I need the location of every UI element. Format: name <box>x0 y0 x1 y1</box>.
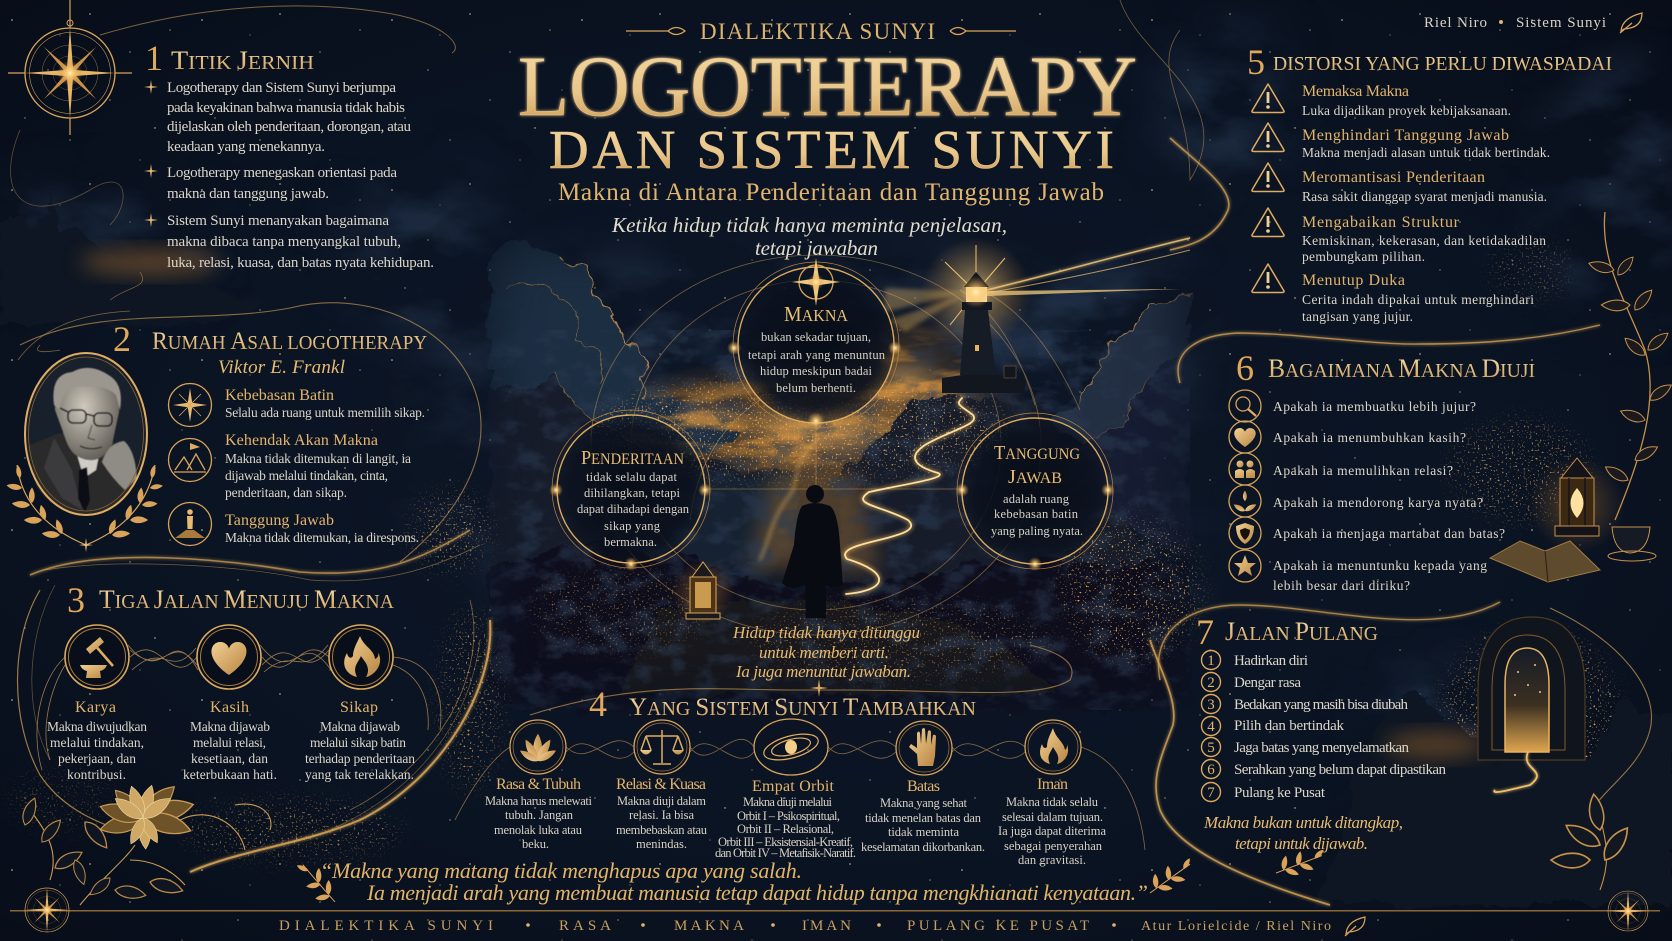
footer text: IMAN <box>802 918 851 934</box>
item: Relasi & Kuasa: Relasi & Kuasa <box>616 776 706 793</box>
item: Relasi & Kuasa: menindas. <box>636 837 687 851</box>
concept: Penderitaan circle: PENDERITAAN <box>581 447 684 469</box>
item: Rasa & Tubuh: tubuh. Jangan <box>505 808 574 822</box>
item: Sikap: melalui sikap batin <box>310 735 406 750</box>
icon: compass top-left <box>8 0 132 135</box>
laurel left <box>295 860 335 905</box>
heading: Distorsi: 5 <box>1247 42 1265 82</box>
quote: closing: Ia menjadi arah yang membuat manusia tetap dapat hidup tanpa mengkhianati kenyataan.” <box>366 880 1148 905</box>
item: Tanggung Jawab: Makna tidak ditemukan, ia direspons. <box>225 530 419 545</box>
concept: Tanggung Jawab circle <box>955 413 1115 571</box>
question: karya <box>1229 485 1483 517</box>
item: Tanggung Jawab <box>168 502 419 546</box>
item: Menghindari Tanggung Jawab <box>1302 127 1550 160</box>
quote: Hidup tidak hanya ditunggu: untuk memberi arti. <box>759 643 889 662</box>
item: Mengabaikan Struktur: Kemiskinan, kekerasan, dan ketidakadilan <box>1302 233 1546 248</box>
item: Iman: selesai dalam tujuan. <box>1002 810 1103 824</box>
panel: section 2 Rumah Asal Logotherapy <box>6 319 427 552</box>
panel: section 3 Tiga Jalan Menuju Makna <box>37 580 441 782</box>
concept: Penderitaan circle: dapat dihadapi dengan <box>577 502 690 516</box>
item: Kebebasan Batin: Selalu ada ruang untuk memilih sikap. <box>225 405 425 420</box>
item: Sikap: yang tak terelakkan. <box>305 767 414 782</box>
panel: section 7 Jalan Pulang: 3 <box>1207 697 1215 713</box>
flow lines between circles <box>37 645 441 770</box>
steps text: Pilih dan bertindak <box>1234 718 1344 734</box>
steps text: Serahkan yang belum dapat dipastikan <box>1234 762 1446 778</box>
right clouds and mountains <box>1040 290 1190 560</box>
text block: third point: Sistem Sunyi menanyakan bagaimana <box>167 213 389 229</box>
item: Relasi & Kuasa: membebaskan atau <box>616 823 708 837</box>
quote: closing: “Makna yang matang tidak menghapus apa yang salah. <box>320 858 802 883</box>
item: Mengabaikan Struktur: Mengabaikan Struktur <box>1302 214 1460 231</box>
question: relasi <box>1229 453 1453 485</box>
concept: Tanggung Jawab circle: kebebasan batin <box>994 507 1079 521</box>
left clouds <box>490 243 800 600</box>
quote: Makna bukan: Makna bukan untuk ditangkap, <box>1203 813 1403 832</box>
item: Menghindari Tanggung Jawab: Makna menjadi alasan untuk tidak bertindak. <box>1302 145 1550 160</box>
item: Iman: dan gravitasi. <box>1018 853 1086 867</box>
item: Kasih: Kasih <box>210 699 249 716</box>
item: Karya <box>47 625 147 782</box>
panel: section 5 Distorsi <box>1247 13 1642 324</box>
heading: Rumah Asal Logotherapy: 2 <box>113 319 131 359</box>
panel: section 4 Yang Sistem Sunyi Tambahkan <box>455 684 1145 867</box>
heading: Yang Sistem Sunyi Tambahkan: 4 <box>589 684 607 724</box>
question: kasih: Apakah ia menumbuhkan kasih? <box>1273 430 1466 445</box>
concept: Penderitaan circle: bermakna. <box>604 535 657 549</box>
bullet icons <box>144 80 158 227</box>
question: lebih besar: lebih besar dari diriku? <box>1273 578 1410 593</box>
text block: first point: dijelaskan oleh penderitaan, dorongan, atau <box>167 119 412 135</box>
heading: Bagaimana Makna Diuji: BAGAIMANA MAKNA DIUJI <box>1268 354 1535 383</box>
connecting flow lines <box>455 739 1145 850</box>
title: Dan Sistem Sunyi: DAN SISTEM SUNYI <box>549 119 1114 180</box>
concept: Makna circle: hidup meskipun badai <box>760 364 873 378</box>
item: Kehendak Akan Makna: Makna tidak ditemukan di langit, ia <box>225 451 411 466</box>
decoration: leaves bottom-right <box>1551 793 1633 890</box>
heading: Jalan Pulang <box>1196 612 1378 652</box>
question: karya: Apakah ia mendorong karya nyata? <box>1273 495 1483 510</box>
item: Rasa & Tubuh: Rasa & Tubuh <box>496 776 581 793</box>
heading: Titik Jernih <box>145 38 314 78</box>
heading: Distorsi: DISTORSI YANG PERLU DIWASPADAI <box>1273 53 1612 75</box>
tagline: tetapi jawaban <box>755 236 878 260</box>
concept: Tanggung Jawab circle: yang paling nyata. <box>991 524 1083 538</box>
subtitle: Makna di Antara Penderitaan dan Tanggung Jawab <box>558 179 1104 206</box>
orbit lines <box>591 255 1080 635</box>
footer line and compasses <box>10 884 1660 936</box>
item: Kehendak Akan Makna: penderitaan, dan sikap. <box>225 485 347 500</box>
item: Kehendak Akan Makna: Kehendak Akan Makna <box>225 432 378 449</box>
item: Batas: keselamatan dikorbankan. <box>861 840 985 854</box>
panel: section 1 Titik Jernih <box>144 38 434 271</box>
concept: Makna circle: belum berhenti. <box>776 381 856 395</box>
item: Empat Orbit: Orbit I – Psikospiritual, <box>737 809 840 823</box>
item: Mengabaikan Struktur <box>1302 214 1546 264</box>
text block: second point: Logotherapy menegaskan orientasi pada <box>167 165 397 181</box>
item: Empat Orbit <box>715 719 856 860</box>
concept: Makna circle: bukan sekadar tujuan, <box>761 330 871 344</box>
question: kasih <box>1229 421 1466 453</box>
landscape: upper-left forest and hills <box>0 195 270 325</box>
numbered steps <box>1202 650 1220 802</box>
illustration: glowing archway <box>1478 617 1585 792</box>
flourish below quote <box>810 679 828 697</box>
panel: section 7 Jalan Pulang: 4 <box>1207 719 1215 735</box>
item: Empat Orbit: Orbit III – Eksistensial-Kreatif, <box>718 835 853 849</box>
concept: Penderitaan circle <box>549 410 712 571</box>
item: Empat Orbit: Empat Orbit <box>752 778 835 795</box>
landscape: central valley, clouds and mountains <box>490 243 1190 710</box>
item: Iman: sebagai penyerahan <box>1004 839 1103 853</box>
text block: third point: luka, relasi, kuasa, dan batas nyata kehidupan. <box>167 255 434 271</box>
item: Batas: tidak menelan batas dan <box>865 811 982 825</box>
item: Iman: Makna tidak selalu <box>1006 795 1099 809</box>
concept: Penderitaan circle: tidak selalu dapat <box>586 470 678 484</box>
quote: Hidup tidak hanya ditunggu <box>732 623 920 681</box>
footer text: PULANG KE PUSAT <box>907 918 1089 934</box>
item: Batas: tidak meminta <box>888 825 959 839</box>
panel: section 7 Jalan Pulang: 7 <box>1207 785 1215 801</box>
item: Iman: Ia juga dapat diterima <box>998 824 1106 838</box>
concept: Makna circle <box>727 258 902 430</box>
figure: standing person <box>782 485 843 618</box>
item: Iman <box>998 720 1106 867</box>
heading: Rumah Asal Logotherapy: RUMAH ASAL LOGOTHERAPY <box>152 328 427 355</box>
item: Kehendak Akan Makna: dijawab melalui tindakan, cinta, <box>225 468 388 483</box>
item: Sikap: Sikap <box>340 699 378 716</box>
icon: lantern on ground <box>671 560 735 624</box>
item: Meromantisasi Penderitaan: Meromantisasi Penderitaan <box>1302 169 1485 186</box>
icon: crescent moon <box>471 150 505 193</box>
steps text: Hadirkan diri <box>1234 653 1308 669</box>
text block: second point: makna dan tanggung jawab. <box>167 186 329 202</box>
question: lebih besar <box>1229 550 1487 593</box>
panel: section 7 Jalan Pulang: 1 <box>1207 653 1215 669</box>
item: Sikap: Makna dijawab <box>320 719 400 734</box>
heading: Tiga Jalan Menuju Makna: TIGA JALAN MENUJU MAKNA <box>99 585 395 614</box>
concept: Penderitaan circle: dihilangkan, tetapi <box>584 486 681 500</box>
text block: first point: keadaan yang menekannya. <box>167 139 325 155</box>
laurel under portrait <box>6 465 163 552</box>
panel: section 7 Jalan Pulang: 2 <box>1207 675 1215 691</box>
question: martabat: Apakah ia menjaga martabat dan batas? <box>1273 526 1505 541</box>
panel: section 7 Jalan Pulang <box>1196 612 1446 884</box>
item: Karya: Karya <box>75 699 116 716</box>
item: Menutup Duka <box>1302 272 1534 324</box>
item: Memaksa Makna: Memaksa Makna <box>1302 83 1409 100</box>
item: Rasa & Tubuh <box>485 720 593 851</box>
steps text <box>1234 653 1446 801</box>
item: Sikap: terhadap penderitaan <box>305 751 415 766</box>
heading: Tiga Jalan Menuju Makna <box>67 580 395 620</box>
steps text: Bedakan yang masih bisa diubah <box>1234 697 1408 713</box>
quote: Makna bukan <box>1203 813 1403 853</box>
concept: Penderitaan circle: sikap yang <box>604 519 661 533</box>
question: lebih besar: Apakah ia menuntunku kepada yang <box>1273 558 1487 573</box>
item: Meromantisasi Penderitaan: Rasa sakit dianggap syarat menjadi manusia. <box>1302 189 1547 204</box>
item: Meromantisasi Penderitaan <box>1302 169 1547 204</box>
item: Karya: melalui tindakan, <box>50 735 144 750</box>
warning icons <box>1252 84 1284 292</box>
question: relasi: Apakah ia memulihkan relasi? <box>1273 463 1453 478</box>
item: Rasa & Tubuh: Makna harus melewati <box>485 794 593 808</box>
footer text: MAKNA <box>674 918 744 934</box>
golden lit cloud band <box>646 326 968 473</box>
concept: Tanggung Jawab circle: JAWAB <box>1008 466 1062 488</box>
tagline <box>611 213 1007 260</box>
item: Kasih: melalui relasi, <box>193 735 266 750</box>
item: Menutup Duka: Cerita indah dipakai untuk menghindari <box>1302 292 1534 307</box>
header: Dialektika Sunyi <box>626 19 1016 44</box>
credit: Riel Niro Sistem Sunyi <box>1424 13 1642 33</box>
steps text: Dengar rasa <box>1234 675 1301 691</box>
item: Kasih: kesetiaan, dan <box>191 751 268 766</box>
heading: Bagaimana Makna Diuji: 6 <box>1236 348 1254 388</box>
item: Memaksa Makna: Luka dijadikan proyek kebijaksanaan. <box>1302 103 1511 118</box>
panel: section 7 Jalan Pulang: 6 <box>1207 762 1215 778</box>
item: Mengabaikan Struktur: pembungkam pilihan. <box>1302 249 1425 264</box>
item: Batas: Batas <box>907 778 940 795</box>
item: Empat Orbit: Orbit II – Relasional, <box>737 822 834 836</box>
question: jujur: Apakah ia membuatku lebih jujur? <box>1273 399 1476 414</box>
heading: Distorsi <box>1247 42 1612 82</box>
item: Menutup Duka: Menutup Duka <box>1302 272 1405 289</box>
text block: second point <box>167 165 397 202</box>
footer text: DIALEKTIKA SUNYI <box>279 918 493 934</box>
winding golden path <box>760 398 974 594</box>
quote: Makna bukan: tetapi untuk dijawab. <box>1235 834 1368 853</box>
item: Karya: kontribusi. <box>67 767 126 782</box>
rock texture <box>490 330 1190 710</box>
item: Kasih: keterbukaan hati. <box>183 767 277 782</box>
concept: Makna circle: MAKNA <box>784 302 849 326</box>
text block: first point: Logotherapy dan Sistem Sunyi berjumpa <box>167 80 396 96</box>
concept: Tanggung Jawab circle: adalah ruang <box>1003 492 1070 506</box>
heading: Jalan Pulang: JALAN PULANG <box>1225 617 1378 646</box>
illustration: lantern, book and cup <box>1490 457 1656 582</box>
horizon light <box>644 365 1024 488</box>
heading: Titik Jernih: TITIK JERNIH <box>171 46 314 75</box>
item: Menutup Duka: tangisan yang jujur. <box>1302 309 1413 324</box>
item: Karya: Makna diwujudkan <box>47 719 147 734</box>
heading: Rumah Asal Logotherapy <box>113 319 427 359</box>
item: Rasa & Tubuh: beku. <box>522 837 549 851</box>
lighthouse with beams <box>885 237 1190 393</box>
text block: third point: makna dibaca tanpa menyangkal tubuh, <box>167 234 401 250</box>
heading: Bagaimana Makna Diuji <box>1236 348 1535 388</box>
item: Memaksa Makna <box>1302 83 1511 118</box>
question: jujur <box>1229 390 1476 422</box>
heading: Yang Sistem Sunyi Tambahkan <box>589 684 976 724</box>
footer text: Atur Lorielcide / Riel Niro <box>1141 919 1331 934</box>
item: Sikap <box>305 625 415 782</box>
steps text: Pulang ke Pusat <box>1234 785 1326 801</box>
header: Dialektika Sunyi: DIALEKTIKA SUNYI <box>700 19 935 44</box>
footer text <box>279 917 1365 936</box>
item: Kebebasan Batin: Kebebasan Batin <box>225 387 334 404</box>
text block: first point <box>167 80 412 155</box>
credit: Riel Niro Sistem Sunyi: Sistem Sunyi <box>1516 15 1606 31</box>
heading: Jalan Pulang: 7 <box>1196 612 1214 652</box>
heading: Tiga Jalan Menuju Makna: 3 <box>67 580 85 620</box>
item: Tanggung Jawab: Tanggung Jawab <box>225 512 334 529</box>
item: Empat Orbit: Makna diuji melalui <box>743 795 833 809</box>
landscape: section 7 mountains and right foliage <box>1320 690 1672 905</box>
panel: section 6 Bagaimana Makna Diuji <box>1229 348 1535 593</box>
item: Kasih: Makna dijawab <box>190 719 270 734</box>
item: Batas: Makna yang sehat <box>880 796 968 810</box>
item: Kasih <box>183 625 277 782</box>
panel: section 7 Jalan Pulang: 5 <box>1207 740 1215 756</box>
item: Kebebasan Batin <box>168 384 425 426</box>
item: Kehendak Akan Makna <box>168 432 411 500</box>
item: Relasi & Kuasa <box>616 720 708 851</box>
text block: third point <box>167 213 434 271</box>
item: Iman: Iman <box>1037 776 1068 793</box>
item: Empat Orbit: dan Orbit IV – Metafisik-Naratif. <box>715 846 856 860</box>
item: Batas <box>861 721 985 854</box>
sprig <box>1276 838 1326 884</box>
steps text: Jaga batas yang menyelamatkan <box>1234 740 1410 756</box>
concept: Makna circle: tetapi arah yang menuntun <box>748 348 886 362</box>
gold glitter dust across the scene <box>0 228 1630 875</box>
heading: Yang Sistem Sunyi Tambahkan: YANG SISTEM SUNYI TAMBAHKAN <box>629 694 976 721</box>
quote: Hidup tidak hanya ditunggu: Hidup tidak hanya ditunggu <box>732 623 920 642</box>
item: Menghindari Tanggung Jawab: Menghindari Tanggung Jawab <box>1302 127 1509 144</box>
concept: Tanggung Jawab circle: TANGGUNG <box>994 442 1080 464</box>
decoration: gold lotus and branches <box>20 780 271 905</box>
decoration: vine on right <box>1588 212 1672 520</box>
portrait: Viktor Frankl <box>25 353 147 515</box>
question: martabat <box>1229 517 1505 549</box>
central hills <box>704 394 1145 584</box>
heading: Titik Jernih: 1 <box>145 38 163 78</box>
item: Karya: pekerjaan, dan <box>58 751 136 766</box>
quote: Hidup tidak hanya ditunggu: Ia juga menuntut jawaban. <box>735 662 911 681</box>
laurel right <box>1150 857 1192 893</box>
text block: first point: pada keyakinan bahwa manusia tidak habis <box>167 100 405 116</box>
tagline: Ketika hidup tidak hanya meminta penjelasan, <box>611 213 1007 237</box>
item: Relasi & Kuasa: relasi. Ia bisa <box>629 808 694 822</box>
quote: closing <box>295 858 1148 905</box>
credit: Riel Niro Sistem Sunyi: Riel Niro <box>1424 15 1487 31</box>
title: Logotherapy: LOGOTHERAPY <box>518 38 1137 134</box>
item: Relasi & Kuasa: Makna diuji dalam <box>617 794 706 808</box>
footer text: RASA <box>559 918 611 934</box>
subheading: Viktor E. Frankl: Viktor E. Frankl <box>218 357 345 378</box>
item: Rasa & Tubuh: menolak luka atau <box>494 823 583 837</box>
